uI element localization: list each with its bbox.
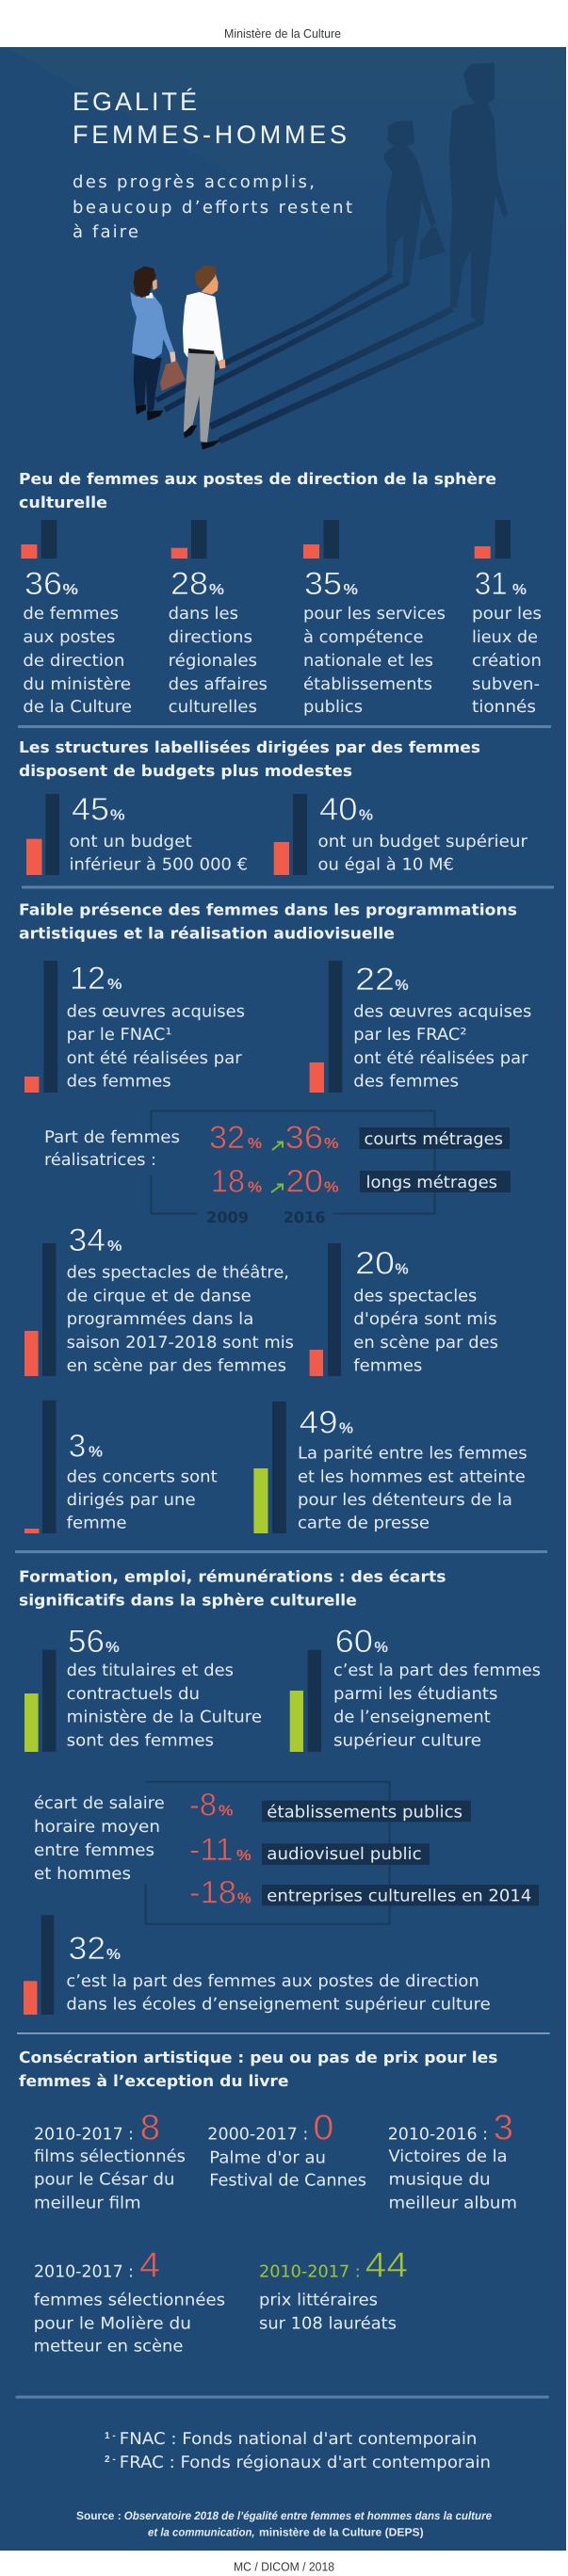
heading: section 2 — [19, 738, 480, 780]
prize: Palme d'or: 0 — [313, 2109, 333, 2148]
stat: 20% opéra: des spectacles — [353, 1287, 477, 1305]
stat: 31% lieux de création: pour les — [472, 605, 542, 624]
stat: 56% ministère: sont des femmes — [67, 1731, 214, 1750]
chart: écart de salaire: et hommes — [34, 1865, 131, 1884]
stat: 49% carte de presse: 49 — [300, 1405, 338, 1441]
chart: écart de salaire: audiovisuel public — [267, 1845, 422, 1864]
source: ministère de la Culture (DEPS) — [259, 2526, 424, 2539]
footnotes — [105, 2430, 491, 2472]
stat: 32% écoles: dans les écoles d’enseignement supérieur culture — [66, 1995, 491, 2014]
stat: 20% opéra — [310, 1243, 498, 1376]
stat: 45% budget — [26, 792, 248, 875]
stat: 28% DRAC: % — [209, 582, 224, 598]
stat: 40% budget: ont un budget supérieur — [318, 833, 528, 851]
stat: 22% FRAC: des œuvres acquises — [353, 1002, 531, 1021]
stat: 60% étudiants: parmi les étudiants — [333, 1685, 497, 1704]
stat: 32% écoles — [24, 1915, 491, 2015]
title: EGALITÉ — [73, 88, 197, 116]
stat: 3% concerts: % — [89, 1445, 103, 1461]
prize: Molière: 2010-2017 : — [34, 2262, 134, 2281]
stat: 35% services: 35 — [304, 566, 342, 602]
stat: 28% DRAC: des affaires — [169, 675, 268, 694]
stat: 36% ministry: aux postes — [23, 628, 115, 647]
subtitle: beaucoup d’efforts restent — [73, 198, 352, 218]
stat: 36% ministry: du ministère — [23, 675, 131, 694]
stat: 60% étudiants: supérieur culture — [333, 1731, 481, 1750]
woman and man shadows — [156, 63, 508, 441]
stat: 34% spectacles: saison 2017-2018 sont mis — [67, 1334, 294, 1353]
chart: part de femmes réalisatrices: 18 — [211, 1164, 245, 1200]
bottom credit: MC / DICOM / 2018 — [234, 2559, 334, 2573]
stat: 3% concerts: des concerts sont — [67, 1467, 218, 1486]
heading: section 4: Formation, emploi, rémunérations : des écarts — [19, 1567, 446, 1585]
prize: Victoires de la musique: 3 — [494, 2109, 513, 2148]
man figure — [183, 266, 225, 449]
stat: 22% FRAC: % — [395, 978, 409, 994]
stat: 45% budget: % — [110, 808, 125, 824]
chart: écart de salaire — [34, 1782, 539, 1924]
prize: Molière: 4 — [139, 2245, 160, 2285]
stat: 3% concerts: 3 — [69, 1429, 86, 1465]
chart: part de femmes réalisatrices — [44, 1111, 511, 1226]
stat: 36% ministry — [21, 520, 132, 717]
stat: 35% services: établissements — [303, 675, 432, 694]
stat: 60% étudiants: de l’enseignement — [333, 1709, 491, 1727]
stat: 31% lieux de création — [472, 520, 542, 717]
stat: 56% ministère: 56 — [68, 1624, 105, 1660]
prize: César: 8 — [140, 2109, 160, 2148]
title — [73, 88, 347, 149]
stat: 40% budget — [274, 792, 528, 875]
chart: part de femmes réalisatrices: % — [324, 1180, 339, 1196]
chart: part de femmes réalisatrices: courts métrages — [364, 1130, 503, 1149]
prize: prix littéraires: 44 — [365, 2245, 408, 2285]
chart: part de femmes réalisatrices: 2009 — [206, 1208, 249, 1226]
stat: 60% étudiants — [290, 1624, 541, 1752]
heading: section 3: Faible présence des femmes dans les programmations — [19, 901, 517, 919]
prize: prix littéraires: 2010-2017 : — [259, 2262, 361, 2281]
stat: 49% carte de presse: pour les détenteurs de la — [298, 1491, 512, 1510]
stat: 56% ministère: contractuels du — [67, 1685, 200, 1704]
chart: écart de salaire: -8 — [189, 1788, 217, 1823]
source: et la communication, — [148, 2526, 255, 2539]
prize: Palme d'or: Palme d'or au — [209, 2149, 326, 2168]
prize: César — [34, 2109, 186, 2212]
footnotes: FNAC : Fonds national d'art contemporain — [120, 2430, 477, 2449]
chart: part de femmes réalisatrices: réalisatrices : — [44, 1151, 156, 1170]
stat: 20% opéra: d'opéra sont mis — [353, 1310, 497, 1329]
stat: 12% FNAC: ont été réalisées par — [67, 1049, 243, 1068]
stat: 3% concerts: femme — [67, 1515, 126, 1533]
prize: Molière: pour le Molière du — [34, 2314, 191, 2333]
prize: César: 2010-2017 : — [34, 2126, 134, 2145]
chart: part de femmes réalisatrices: 2016 — [284, 1208, 326, 1226]
chart: part de femmes réalisatrices: longs métrages — [365, 1174, 497, 1192]
stat: 34% spectacles: de cirque et de danse — [67, 1287, 252, 1305]
prize: Molière: femmes sélectionnées — [34, 2291, 225, 2309]
stat: 12% FNAC: par le FNAC¹ — [67, 1026, 171, 1045]
prize: prix littéraires: prix littéraires — [259, 2291, 378, 2309]
stat: 45% budget: ont un budget — [70, 833, 192, 851]
source: Observatoire 2018 de l’égalité entre femmes et hommes dans la culture — [124, 2509, 492, 2522]
stat: 22% FRAC: ont été réalisées par — [353, 1049, 528, 1068]
stat: 32% écoles: 32 — [69, 1931, 105, 1967]
stat: 36% ministry: 36 — [24, 566, 62, 602]
stat: 31% lieux de création: % — [512, 582, 527, 598]
prize: Palme d'or — [207, 2109, 366, 2191]
prize: Palme d'or: 2000-2017 : — [207, 2126, 308, 2145]
stat: 60% étudiants: % — [374, 1640, 388, 1656]
stat: 45% budget: inférieur à 500 000 € — [70, 856, 248, 875]
stat: 31% lieux de création: 31 — [475, 566, 508, 602]
chart: écart de salaire: entreprises culturelles en 2014 — [267, 1887, 531, 1905]
icon: green arrow — [271, 1185, 283, 1192]
heading: section 5: Consécration artistique : peu ou pas de prix pour les — [19, 2049, 498, 2066]
stat: 34% spectacles: programmées dans la — [67, 1310, 253, 1329]
prize: Molière: metteur en scène — [34, 2338, 183, 2357]
stat: 36% ministry: de la Culture — [23, 698, 132, 717]
source — [76, 2509, 492, 2539]
chart: écart de salaire: -18 — [189, 1875, 236, 1911]
stat: 60% étudiants: c’est la part des femmes — [333, 1661, 541, 1680]
stat: 36% ministry: de femmes — [23, 605, 119, 624]
subtitle: des progrès accomplis, — [73, 172, 315, 192]
stat: 35% services: % — [343, 582, 358, 598]
chart: part de femmes réalisatrices: Part de femmes — [44, 1128, 180, 1147]
stat: 35% services: pour les services — [303, 605, 446, 624]
stat: 45% budget: 45 — [72, 792, 109, 828]
stat: 49% carte de presse: % — [339, 1421, 353, 1437]
prize: Palme d'or: Festival de Cannes — [209, 2172, 366, 2191]
stat: 56% ministère: des titulaires et des — [67, 1661, 234, 1680]
stat: 49% carte de presse — [253, 1401, 527, 1533]
stat: 12% FNAC: 12 — [70, 961, 105, 996]
stat: 35% services: publics — [303, 698, 363, 717]
chart: écart de salaire: % — [219, 1804, 233, 1820]
stat: 3% concerts: dirigés par une — [67, 1491, 196, 1510]
footnotes: 2 - — [105, 2454, 116, 2465]
icon: green arrow — [272, 1142, 283, 1150]
chart: écart de salaire: % — [236, 1848, 252, 1864]
chart: part de femmes réalisatrices: % — [248, 1180, 262, 1196]
stat: 34% spectacles: % — [107, 1239, 122, 1255]
stat: 34% spectacles — [24, 1223, 294, 1376]
chart: part de femmes réalisatrices: 36 — [285, 1120, 323, 1156]
title: FEMMES-HOMMES — [73, 121, 347, 149]
stat: 56% ministère: % — [105, 1640, 120, 1656]
chart: part de femmes réalisatrices: 20 — [285, 1164, 323, 1200]
stat: 3% concerts — [24, 1401, 218, 1533]
prize: César: pour le César du — [34, 2170, 175, 2189]
stat: 32% écoles: % — [106, 1947, 121, 1963]
stat: 40% budget: ou égal à 10 M€ — [318, 856, 454, 875]
footnotes: FRAC : Fonds régionaux d'art contemporain — [120, 2454, 491, 2472]
stat: 28% DRAC: 28 — [170, 566, 208, 602]
header illustration — [8, 48, 566, 449]
stat: 28% DRAC: régionales — [169, 652, 257, 671]
stat: 12% FNAC: des œuvres acquises — [67, 1002, 245, 1021]
footnotes: 1 - — [105, 2431, 116, 2441]
prize: Victoires de la musique: meilleur album — [388, 2194, 517, 2212]
stat: 34% spectacles: 34 — [69, 1223, 105, 1258]
stat: 35% services — [303, 520, 446, 717]
heading: section 5: femmes à l’exception du livre — [19, 2072, 288, 2090]
stat: 40% budget: % — [359, 808, 373, 824]
chart: part de femmes réalisatrices: % — [324, 1136, 339, 1152]
heading: section 1 — [19, 470, 496, 511]
heading: section 3: artistiques et la réalisation audiovisuelle — [19, 925, 395, 943]
stat: 31% lieux de création: création — [472, 652, 542, 671]
stat: 20% opéra: femmes — [353, 1357, 422, 1376]
stat: 36% ministry: de direction — [23, 652, 124, 671]
chart: écart de salaire: % — [237, 1891, 252, 1907]
chart: écart de salaire: horaire moyen — [34, 1818, 160, 1837]
prize: prix littéraires — [259, 2245, 408, 2333]
chart: part de femmes réalisatrices: % — [248, 1136, 262, 1152]
heading: section 4 — [19, 1567, 446, 1609]
heading: section 1: Peu de femmes aux postes de direction de la sphère — [19, 470, 496, 488]
stat: 12% FNAC — [24, 961, 245, 1093]
stat: 34% spectacles: des spectacles de théâtre, — [67, 1264, 289, 1283]
stat: 20% opéra: 20 — [355, 1246, 395, 1282]
prize: Victoires de la musique: 2010-2016 : — [388, 2126, 488, 2145]
stat: 49% carte de presse: La parité entre les femmes — [298, 1444, 527, 1463]
source: Source : — [76, 2509, 122, 2522]
prize: Victoires de la musique — [388, 2109, 517, 2212]
stat: 28% DRAC: culturelles — [169, 698, 257, 717]
stat: 40% budget: 40 — [319, 792, 358, 828]
stat: 36% ministry: % — [62, 582, 78, 598]
subtitle — [73, 172, 352, 242]
heading: section 3 — [19, 901, 517, 943]
stat: 28% DRAC: dans les — [169, 605, 238, 624]
subtitle: à faire — [73, 222, 138, 242]
stat: 22% FRAC: 22 — [355, 962, 395, 997]
heading: section 2: disposent de budgets plus modestes — [19, 762, 352, 780]
stat: 31% lieux de création: subven- — [472, 675, 540, 694]
stat: 28% DRAC: directions — [169, 628, 252, 647]
stat: 35% services: à compétence — [303, 628, 424, 647]
stat: 60% étudiants: 60 — [335, 1624, 373, 1660]
stat: 22% FRAC — [310, 961, 531, 1093]
top ministry label: Ministère de la Culture — [224, 26, 341, 41]
chart: écart de salaire: écart de salaire — [34, 1794, 165, 1813]
prize: César: meilleur film — [34, 2194, 141, 2212]
heading: section 1: culturelle — [19, 494, 107, 511]
stat: 49% carte de presse: et les hommes est atteinte — [298, 1467, 526, 1486]
stat: 20% opéra: % — [395, 1262, 409, 1278]
chart: écart de salaire: -11 — [189, 1832, 233, 1868]
stat: 32% écoles: c’est la part des femmes aux postes de direction — [66, 1972, 479, 1991]
stat: 31% lieux de création: tionnés — [472, 698, 536, 717]
stat: 22% FRAC: par les FRAC² — [353, 1026, 467, 1045]
chart: écart de salaire: entre femmes — [34, 1841, 154, 1860]
prize: Victoires de la musique: Victoires de la — [388, 2147, 507, 2166]
stat: 56% ministère: ministère de la Culture — [67, 1709, 262, 1727]
stat: 20% opéra: en scène par des — [353, 1334, 498, 1353]
stat: 12% FNAC: des femmes — [67, 1073, 171, 1092]
stat: 35% services: nationale et les — [303, 652, 433, 671]
woman figure — [130, 267, 186, 421]
chart: part de femmes réalisatrices: 32 — [209, 1120, 245, 1156]
prize: César: films sélectionnés — [34, 2147, 186, 2166]
heading: section 5 — [19, 2049, 498, 2090]
stat: 49% carte de presse: carte de presse — [298, 1515, 430, 1533]
stat: 34% spectacles: en scène par des femmes — [67, 1357, 286, 1376]
stat: 28% DRAC — [169, 520, 268, 717]
stat: 12% FNAC: % — [107, 977, 122, 993]
prize: Victoires de la musique: musique du — [388, 2170, 491, 2189]
stat: 56% ministère — [24, 1624, 262, 1752]
prize: Molière — [34, 2245, 225, 2357]
stat: 22% FRAC: des femmes — [353, 1073, 459, 1092]
heading: section 2: Les structures labellisées dirigées par des femmes — [19, 738, 480, 756]
heading: section 4: significatifs dans la sphère culturelle — [19, 1591, 357, 1609]
prize: prix littéraires: sur 108 lauréats — [259, 2314, 397, 2333]
chart: écart de salaire: établissements publics — [267, 1803, 463, 1822]
stat: 31% lieux de création: lieux de — [472, 628, 538, 647]
